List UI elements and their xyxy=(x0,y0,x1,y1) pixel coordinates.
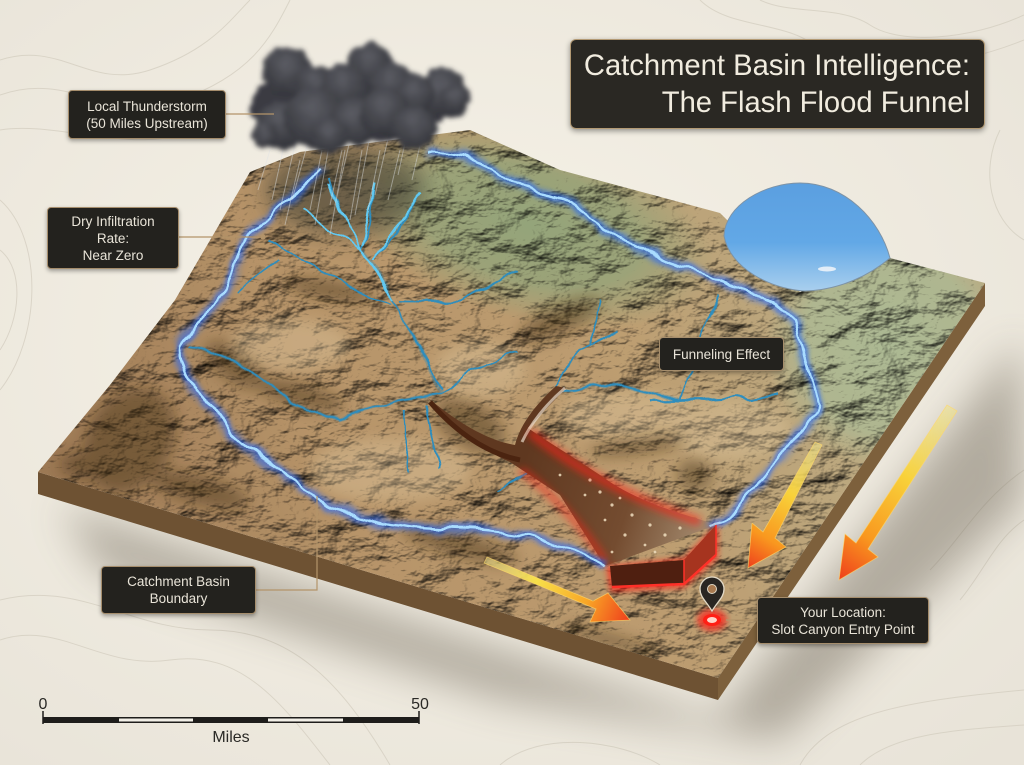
label: funneling effect xyxy=(659,337,784,371)
arrow: centre right xyxy=(748,442,822,568)
label: your location: Slot Canyon Entry Point xyxy=(771,622,915,636)
location pin xyxy=(697,577,727,631)
terrain block xyxy=(30,100,1010,700)
scale bar: 0 xyxy=(39,696,48,713)
arrow: far right xyxy=(839,405,957,580)
block shadow xyxy=(60,340,1024,740)
red canyon entry xyxy=(606,523,718,592)
scale bar: 50 xyxy=(411,696,429,713)
label: dry infiltration rate: Rate: xyxy=(97,230,129,246)
leader lines xyxy=(178,114,758,620)
label: dry infiltration rate xyxy=(47,207,179,269)
scale bar xyxy=(39,696,429,746)
label: funneling effect: Funneling Effect xyxy=(673,346,770,362)
block sides xyxy=(38,472,718,700)
terrain surface xyxy=(38,130,985,678)
macro hillshade: dark flanks xyxy=(60,272,713,659)
title xyxy=(570,39,985,129)
label: local thunderstorm xyxy=(68,90,226,139)
storm cloud xyxy=(250,43,470,154)
flow arrows xyxy=(484,405,957,622)
arrow: lower centre xyxy=(484,557,630,622)
red glow along canyon edges xyxy=(530,432,700,522)
macro hillshade: light tops xyxy=(230,319,790,502)
label: local thunderstorm: (50 Miles Upstream) xyxy=(86,116,208,130)
title: Catchment Basin Intelligence: xyxy=(584,50,970,82)
label: catchment basin boundary: Boundary xyxy=(150,591,207,606)
flash flood canyon xyxy=(428,386,716,566)
storm shadow under rain xyxy=(265,145,425,235)
catchment boundary xyxy=(180,152,818,565)
water lens xyxy=(724,183,890,291)
label: catchment basin boundary xyxy=(101,566,256,614)
rivers xyxy=(190,250,680,420)
rain xyxy=(258,120,420,235)
label: dry infiltration rate: Near Zero xyxy=(83,248,143,262)
label: your location: Your Location: xyxy=(800,604,886,620)
label: dry infiltration rate: Dry Infiltration xyxy=(71,214,155,228)
label: your location xyxy=(757,597,929,644)
title: The Flash Flood Funnel xyxy=(662,87,970,119)
label: local thunderstorm: Local Thunderstorm xyxy=(87,98,207,114)
scale bar: Miles xyxy=(212,729,250,746)
flood specks xyxy=(559,474,682,553)
label: catchment basin boundary: Catchment Basin xyxy=(127,574,230,589)
